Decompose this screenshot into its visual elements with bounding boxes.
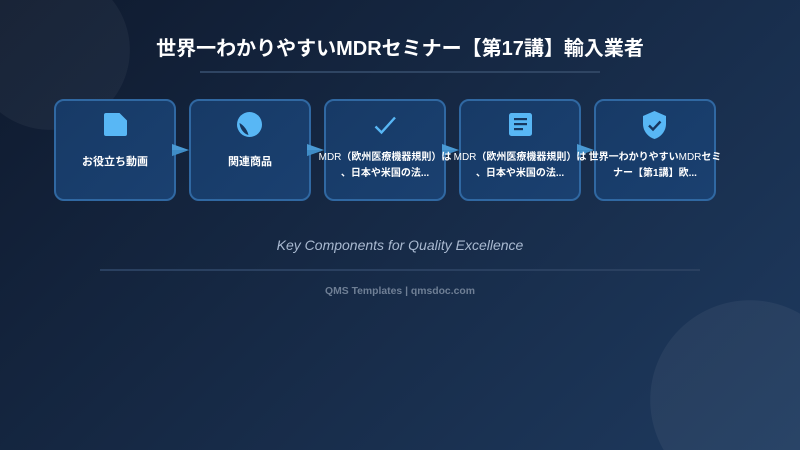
title underline: [200, 71, 600, 73]
label: card 3: 、日本や米国の法...: [341, 168, 429, 179]
arrow 3: [442, 144, 459, 156]
label: card 1: お役立ち動画: [82, 156, 148, 168]
label: card 5: ナー【第1講】欧...: [613, 168, 697, 179]
panel: card 3: [324, 99, 446, 201]
subtitle: Key Components for Quality Excellence: [277, 237, 523, 253]
decorative circle: top left: [0, 0, 130, 130]
icon: article: [509, 113, 532, 136]
label: card 3: MDR（欧州医療機器規則）は: [319, 152, 451, 163]
footer: QMS Templates | qmsdoc.com: [325, 286, 475, 297]
arrow 1: [172, 144, 189, 156]
label: card 3: [319, 151, 451, 179]
divider: [100, 269, 700, 271]
icon: check mark: [374, 116, 396, 134]
panel: card 2: [189, 99, 311, 201]
arrow 2: [307, 144, 324, 156]
label: card 4: [454, 151, 586, 179]
icon: globe: [237, 112, 262, 137]
icon: document: [104, 113, 127, 136]
panel: card 1: [54, 99, 176, 201]
label: card 2: 関連商品: [228, 156, 272, 168]
label: card 5: [589, 151, 721, 179]
panel: card 5: [594, 99, 716, 201]
label: card 5: 世界一わかりやすいMDRセミ: [589, 152, 721, 163]
label: card 4: MDR（欧州医療機器規則）は: [454, 152, 586, 163]
panel: card 4: [459, 99, 581, 201]
decorative circle: bottom right: [650, 300, 800, 450]
icon: shield check: [643, 111, 666, 139]
arrow 4: [577, 144, 594, 156]
label: card 4: 、日本や米国の法...: [476, 168, 564, 179]
title: 世界一わかりやすいMDRセミナー【第17講】輸入業者: [156, 38, 644, 60]
